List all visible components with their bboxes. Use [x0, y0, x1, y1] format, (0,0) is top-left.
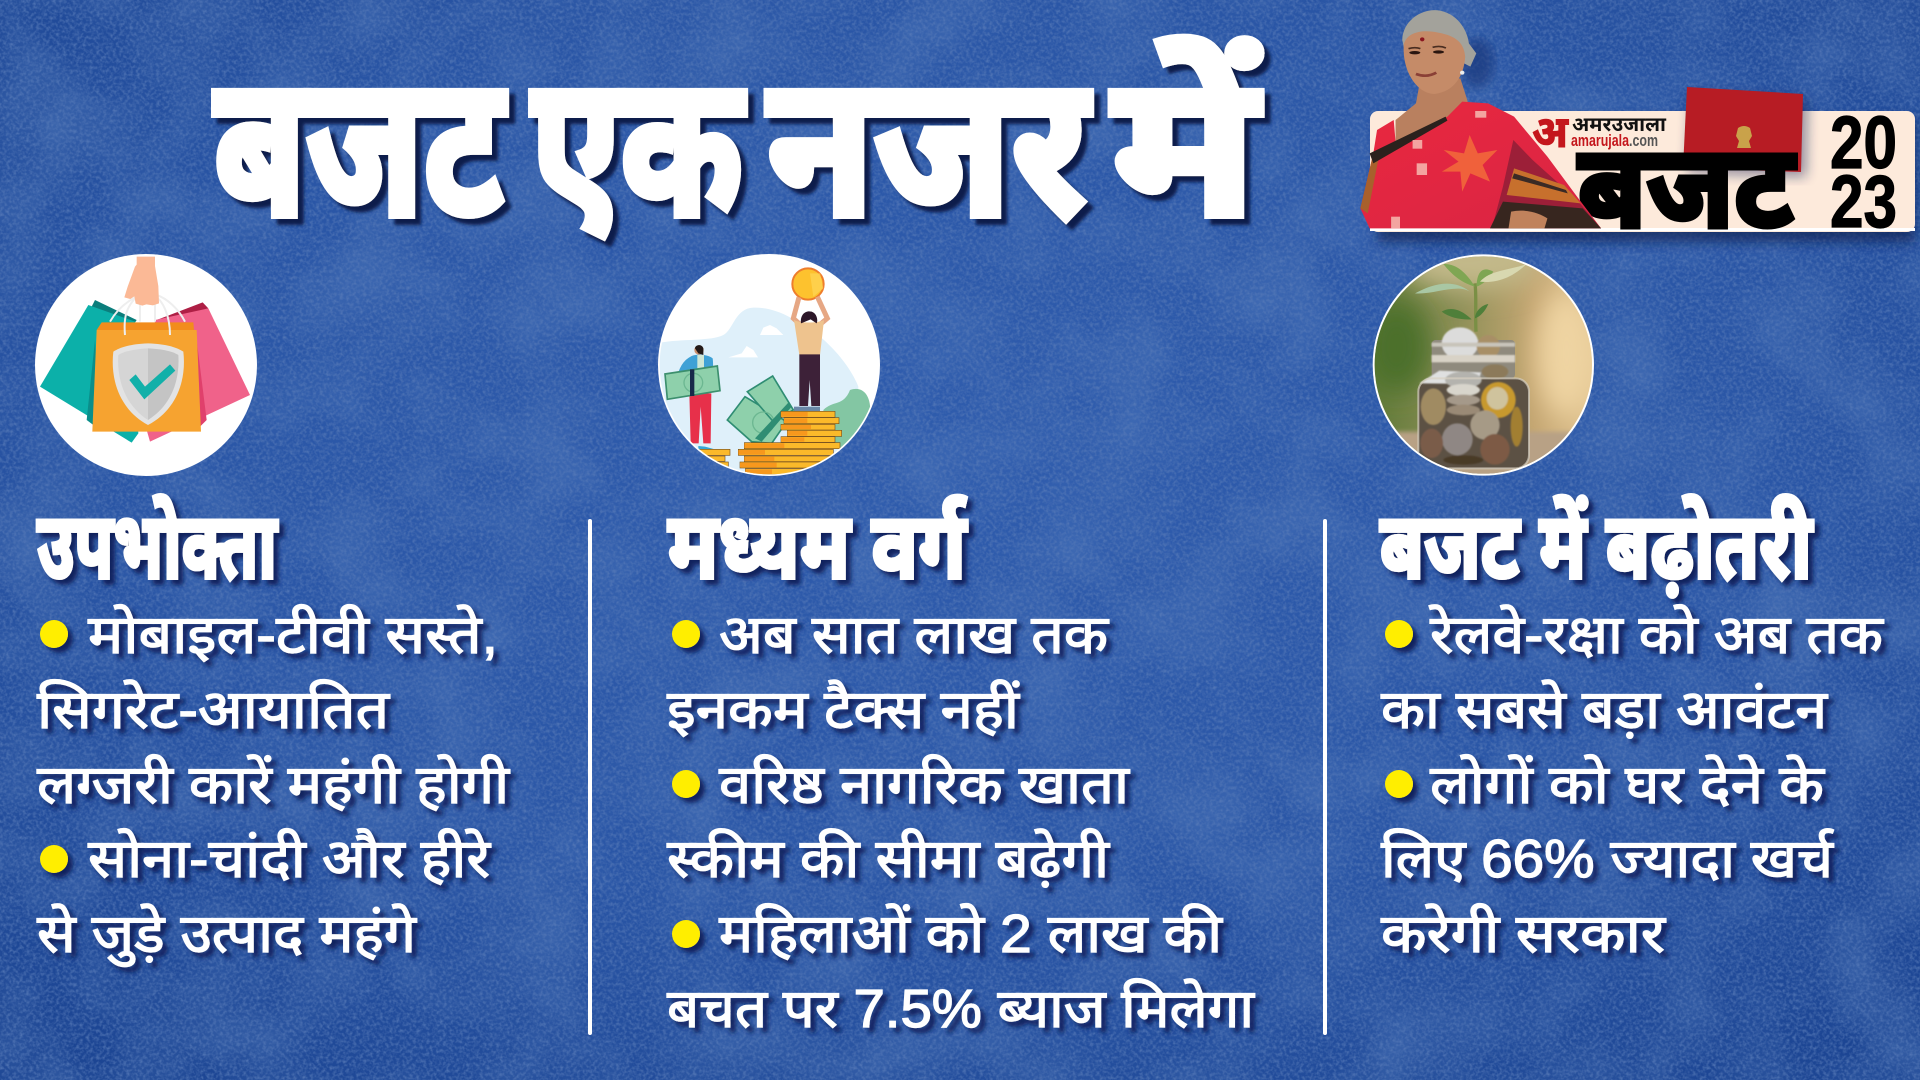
photo: coins in a jar with plant	[1372, 254, 1594, 476]
portrait of the finance minister	[1360, 10, 1601, 228]
middle class points: वरिष्ठ नागरिक खाता	[719, 754, 1130, 815]
icon: people with money and coins	[657, 254, 880, 480]
budget increase points: लिए 66% ज्यादा खर्च	[1381, 828, 1835, 889]
heading: consumer: उपभोक्ता	[37, 496, 278, 598]
heading: budget increase: बजट में बढ़ोतरी	[1380, 495, 1814, 598]
budget increase points	[1381, 604, 1885, 964]
panel: consumer	[37, 496, 510, 967]
newspaper logo: amarujala.com	[1571, 131, 1658, 150]
middle class points: अब सात लाख तक	[719, 605, 1110, 665]
banner strip	[1370, 111, 1915, 242]
budget increase points: करेगी सरकार	[1381, 903, 1666, 964]
panel: budget increase	[1380, 495, 1885, 964]
year 2023	[1830, 101, 1897, 243]
consumer points: से जुड़े उत्पाद महंगे	[37, 903, 418, 967]
panel: middle class	[667, 495, 1255, 1039]
title: एक	[531, 36, 746, 257]
middle class points	[667, 605, 1255, 1039]
budget increase points: रेलवे-रक्षा को अब तक	[1428, 604, 1885, 665]
budget 2023 logo banner with portrait	[1360, 10, 1915, 252]
year 2023: 23	[1830, 160, 1897, 243]
title: नजर	[767, 36, 1091, 257]
heading: middle class: मध्यम वर्ग	[668, 495, 968, 598]
title: बजट	[214, 36, 507, 257]
red budget briefcase	[1683, 87, 1808, 177]
consumer points	[37, 604, 510, 967]
consumer points: लग्जरी कारें महंगी होगी	[37, 754, 510, 815]
divider left	[588, 519, 592, 1035]
middle class points: स्कीम की सीमा बढ़ेगी	[667, 828, 1110, 889]
consumer points: मोबाइल-टीवी सस्ते,	[88, 604, 498, 665]
newspaper logo: अमरउजाला	[1572, 114, 1667, 136]
year 2023: 20	[1830, 101, 1897, 184]
title	[214, 36, 1260, 257]
divider right	[1323, 519, 1327, 1035]
consumer points: सोना-चांदी और हीरे	[88, 828, 491, 889]
newspaper logo	[1532, 108, 1667, 157]
budget increase points: का सबसे बड़ा आवंटन	[1381, 679, 1828, 740]
consumer points: सिगरेट-आयातित	[37, 679, 390, 740]
middle class points: बचत पर 7.5% ब्याज मिलेगा	[667, 978, 1255, 1039]
budget increase points: लोगों को घर देने के	[1430, 754, 1826, 815]
icon: shopping bags	[35, 254, 257, 476]
middle class points: महिलाओं को 2 लाख की	[719, 903, 1223, 964]
newspaper logo: अ	[1532, 108, 1569, 157]
budget word: बजट	[1578, 122, 1796, 252]
title: में	[1112, 36, 1260, 257]
middle class points: इनकम टैक्स नहीं	[667, 678, 1020, 740]
